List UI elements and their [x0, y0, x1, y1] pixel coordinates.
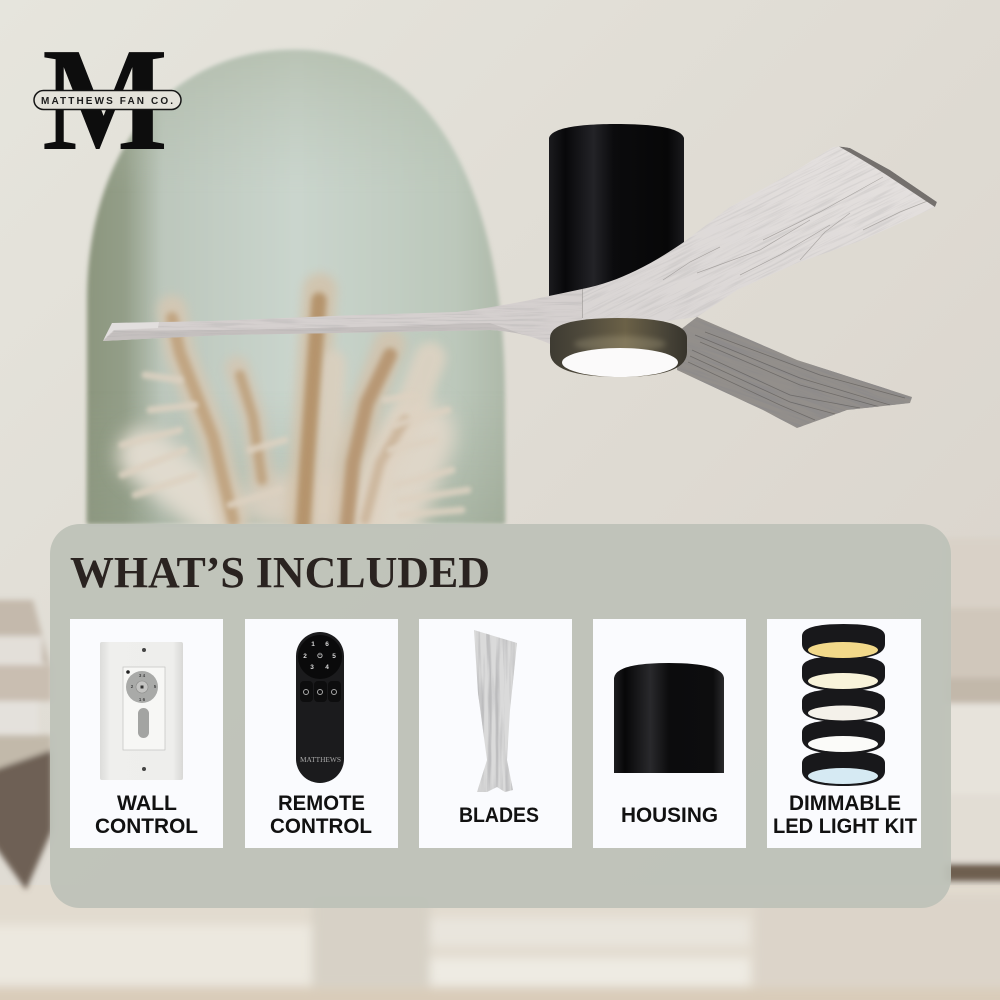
icon: wall control: 3 4	[139, 673, 146, 678]
fan mount cylinder	[549, 124, 684, 300]
icon: remote: 3	[310, 664, 314, 671]
left blade	[103, 289, 582, 344]
label: dimmable LED light kit	[773, 792, 917, 838]
label: wall control	[95, 792, 198, 838]
icon: remote: 2	[303, 653, 307, 660]
icon: blade	[474, 630, 517, 792]
logo: Matthews Fan Co.: M	[42, 19, 168, 182]
panel: what's included	[50, 524, 951, 908]
icon: remote: 4	[325, 664, 329, 671]
icon: remote: ⏻	[317, 652, 323, 660]
icon: LED discs	[802, 624, 885, 786]
heading: WHAT’S INCLUDED	[70, 548, 490, 597]
icon: wall control: 5	[154, 684, 157, 689]
card: blades	[419, 619, 572, 848]
icon: wall control: 2	[131, 684, 134, 689]
label: housing: HOUSING	[621, 804, 718, 827]
icon: remote: MATTHEWS	[300, 756, 341, 764]
pampas grass	[122, 290, 468, 525]
label: wall control: WALL	[117, 792, 177, 815]
card: LED light kit	[767, 619, 921, 848]
icon: remote: 1	[311, 641, 315, 648]
icon: housing	[614, 663, 724, 773]
right blade	[582, 146, 937, 321]
LED light housing	[550, 318, 687, 377]
ceiling fan	[103, 124, 937, 428]
label: dimmable LED light kit: DIMMABLE	[789, 792, 901, 815]
arch alcove	[87, 50, 505, 524]
label: remote control: CONTROL	[270, 815, 372, 838]
card: wall control	[70, 619, 223, 848]
icon: wall control: 1 6	[139, 697, 146, 702]
icon: remote	[296, 632, 344, 783]
label: blades: BLADES	[459, 804, 539, 827]
LED lens	[562, 348, 678, 377]
label: dimmable LED light kit: LED LIGHT KIT	[773, 815, 917, 838]
label: remote control	[270, 792, 372, 838]
icon: wall control	[100, 642, 183, 780]
label: remote control: REMOTE	[278, 792, 365, 815]
icon: remote: 6	[325, 641, 329, 648]
logo: Matthews Fan Co.: MATTHEWS FAN CO.	[41, 96, 173, 107]
label: wall control: CONTROL	[95, 815, 198, 838]
card: housing	[593, 619, 746, 848]
icon: remote: 5	[332, 653, 336, 660]
card: remote control	[245, 619, 398, 848]
rear wood blade	[677, 317, 912, 428]
